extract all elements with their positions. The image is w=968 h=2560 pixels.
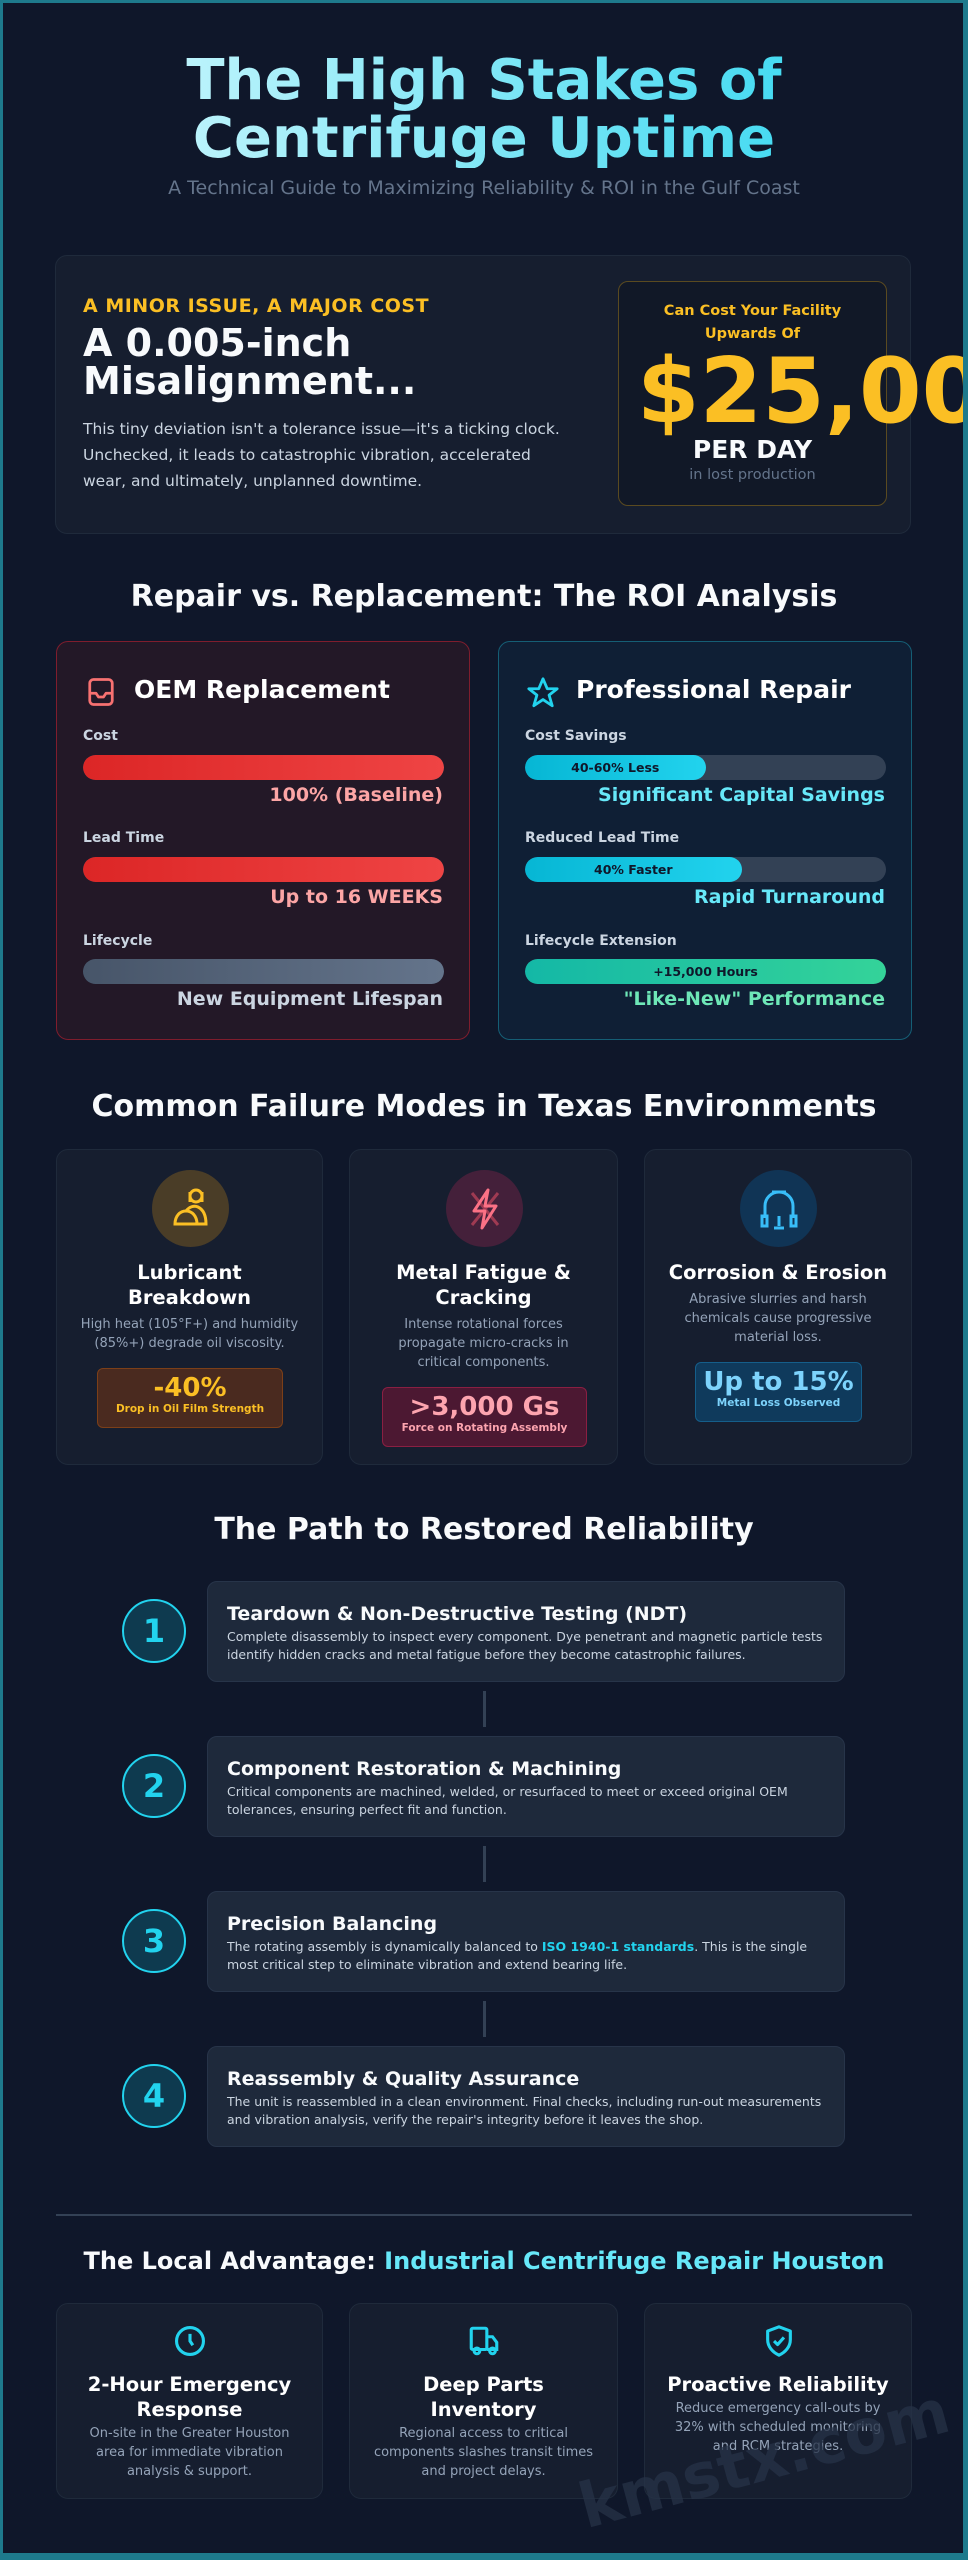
callout: $25,000: Upwards Of — [705, 326, 800, 342]
panel: OEM replacement: Lead Time — [83, 830, 164, 846]
step 4: The unit is reassembled in a clean environment. Final checks, including run-out measurements and vibration analysis, verify the repair's integrity before it leaves the shop. — [227, 2094, 821, 2127]
stat: Drop in Oil Film Strength — [116, 1403, 264, 1415]
icon: star — [527, 677, 559, 708]
step 2: Critical components are machined, welded, or resurfaced to meet or exceed original OEM tolerances, ensuring perfect fit and function. — [227, 1784, 788, 1817]
callout: $25,000: in lost production — [689, 467, 816, 483]
panel: emergency response — [56, 2303, 323, 2499]
panel: metal fatigue — [349, 1149, 618, 1465]
panel: OEM replacement — [56, 641, 470, 1040]
step 1 — [122, 1581, 845, 1682]
panel: metal fatigue: Metal Fatigue & — [396, 1261, 571, 1284]
heading: failure modes: Common Failure Modes in Texas Environments — [91, 1089, 877, 1124]
step 3: Precision Balancing — [227, 1913, 437, 1935]
panel: lubricant breakdown — [56, 1149, 323, 1465]
step 3 — [122, 1891, 845, 1992]
icon: truck — [470, 2326, 498, 2356]
callout: $25,000 — [618, 281, 887, 506]
panel: OEM replacement: New Equipment Lifespan — [177, 988, 443, 1010]
stat — [382, 1387, 587, 1447]
stat: Metal Loss Observed — [717, 1397, 840, 1409]
panel: professional repair: Significant Capital Savings — [598, 784, 885, 806]
panel: professional repair — [498, 641, 912, 1040]
step 3: The rotating assembly is dynamically balanced to ISO 1940-1 standards. This is the single most critical step to eliminate vibration and extend bearing life. — [227, 1939, 807, 1972]
step 1: Complete disassembly to inspect every component. Dye penetrant and magnetic particle tests identify hidden cracks and metal fatigue before they become catastrophic failures. — [227, 1629, 822, 1662]
icon: clock — [175, 2326, 205, 2356]
headline: Misalignment... — [83, 359, 416, 403]
callout: $25,000: PER DAY — [693, 435, 812, 464]
subtitle: A Technical Guide to Maximizing Reliability & ROI in the Gulf Coast — [168, 177, 800, 199]
step 4 — [122, 2046, 845, 2147]
panel: OEM replacement: 100% (Baseline) — [269, 784, 443, 806]
callout: $25,000: Can Cost Your Facility — [664, 303, 841, 319]
panel: OEM replacement: Up to 16 WEEKS — [270, 886, 443, 908]
panel: lubricant breakdown: High heat (105°F+) and humidity (85%+) degrade oil viscosity. — [81, 1317, 298, 1351]
stat: Force on Rotating Assembly — [402, 1422, 567, 1434]
panel: emergency response: 2-Hour Emergency — [88, 2373, 291, 2396]
step 2 — [122, 1736, 845, 1837]
panel: cost intro — [55, 255, 911, 534]
heading: path: The Path to Restored Reliability — [214, 1512, 754, 1547]
icon: bolt — [446, 1170, 523, 1247]
step 2: 2 — [143, 1767, 165, 1805]
panel: corrosion: Abrasive slurries and harsh chemicals cause progressive material loss. — [684, 1292, 871, 1345]
icon: lubricant — [152, 1170, 229, 1247]
step 1: 1 — [143, 1612, 165, 1650]
heading: local advantage: The Local Advantage: Industrial Centrifuge Repair Houston — [84, 2247, 884, 2275]
icon: shield — [766, 2325, 792, 2357]
panel: professional repair: +15,000 Hours — [653, 964, 758, 979]
panel: proactive reliability: Reduce emergency call-outs by 32% with scheduled monitoring and RCM strategies. — [675, 2401, 881, 2454]
panel: metal fatigue: Cracking — [435, 1286, 532, 1309]
stat: -40% — [153, 1373, 227, 1403]
panel: corrosion: Corrosion & Erosion — [669, 1261, 887, 1284]
stat — [695, 1362, 862, 1422]
panel: metal fatigue: Intense rotational forces propagate micro-cracks in critical components. — [398, 1317, 569, 1370]
panel: parts inventory: Regional access to critical components slashes transit times and project delays. — [374, 2426, 593, 2479]
panel: professional repair: 40% Faster — [594, 862, 673, 877]
panel: proactive reliability — [644, 2303, 912, 2499]
panel: corrosion — [644, 1149, 912, 1465]
title: OEM Replacement — [134, 675, 390, 704]
panel: parts inventory: Inventory — [430, 2398, 536, 2421]
headline — [83, 321, 416, 403]
panel: parts inventory: Deep Parts — [423, 2373, 544, 2396]
panel: professional repair: Cost Savings — [525, 728, 627, 744]
panel: parts inventory — [349, 2303, 618, 2499]
panel: OEM replacement: Cost — [83, 728, 118, 744]
title — [0, 52, 968, 168]
title: The High Stakes of — [186, 48, 782, 113]
step 3: 3 — [143, 1922, 165, 1960]
panel: lubricant breakdown: Breakdown — [128, 1286, 251, 1309]
stat: >3,000 Gs — [410, 1392, 559, 1422]
step 1: Teardown & Non-Destructive Testing (NDT) — [227, 1603, 687, 1625]
icon: inbox — [88, 678, 114, 706]
panel: professional repair: Reduced Lead Time — [525, 830, 679, 846]
panel: professional repair: Lifecycle Extension — [525, 933, 677, 949]
panel: professional repair: Rapid Turnaround — [694, 886, 885, 908]
title: Professional Repair — [576, 675, 851, 704]
step 4: 4 — [143, 2077, 165, 2115]
title: Centrifuge Uptime — [193, 106, 775, 171]
step 4: Reassembly & Quality Assurance — [227, 2068, 579, 2090]
watermark: kmstx.com — [571, 2374, 957, 2543]
stat: Up to 15% — [703, 1367, 854, 1397]
panel: emergency response: Response — [137, 2398, 242, 2421]
stat — [97, 1368, 283, 1428]
heading: ROI: Repair vs. Replacement: The ROI Analysis — [131, 579, 837, 614]
panel: lubricant breakdown: Lubricant — [137, 1261, 242, 1284]
panel: professional repair: "Like-New" Performance — [624, 988, 885, 1010]
panel: professional repair: 40-60% Less — [571, 760, 659, 775]
headline: A 0.005-inch — [83, 321, 351, 365]
panel: OEM replacement: Lifecycle — [83, 933, 152, 949]
step 2: Component Restoration & Machining — [227, 1758, 621, 1780]
panel: emergency response: On-site in the Greater Houston area for immediate vibration analysis & support. — [90, 2426, 289, 2479]
icon: magnet — [740, 1170, 817, 1247]
kicker: A MINOR ISSUE, A MAJOR COST — [83, 295, 429, 317]
panel: proactive reliability: Proactive Reliability — [667, 2373, 889, 2396]
body text: This tiny deviation isn't a tolerance issue—it's a ticking clock. Unchecked, it leads to catastrophic vibration, accelerated wear, and ultimately, unplanned downtime. — [83, 420, 560, 490]
